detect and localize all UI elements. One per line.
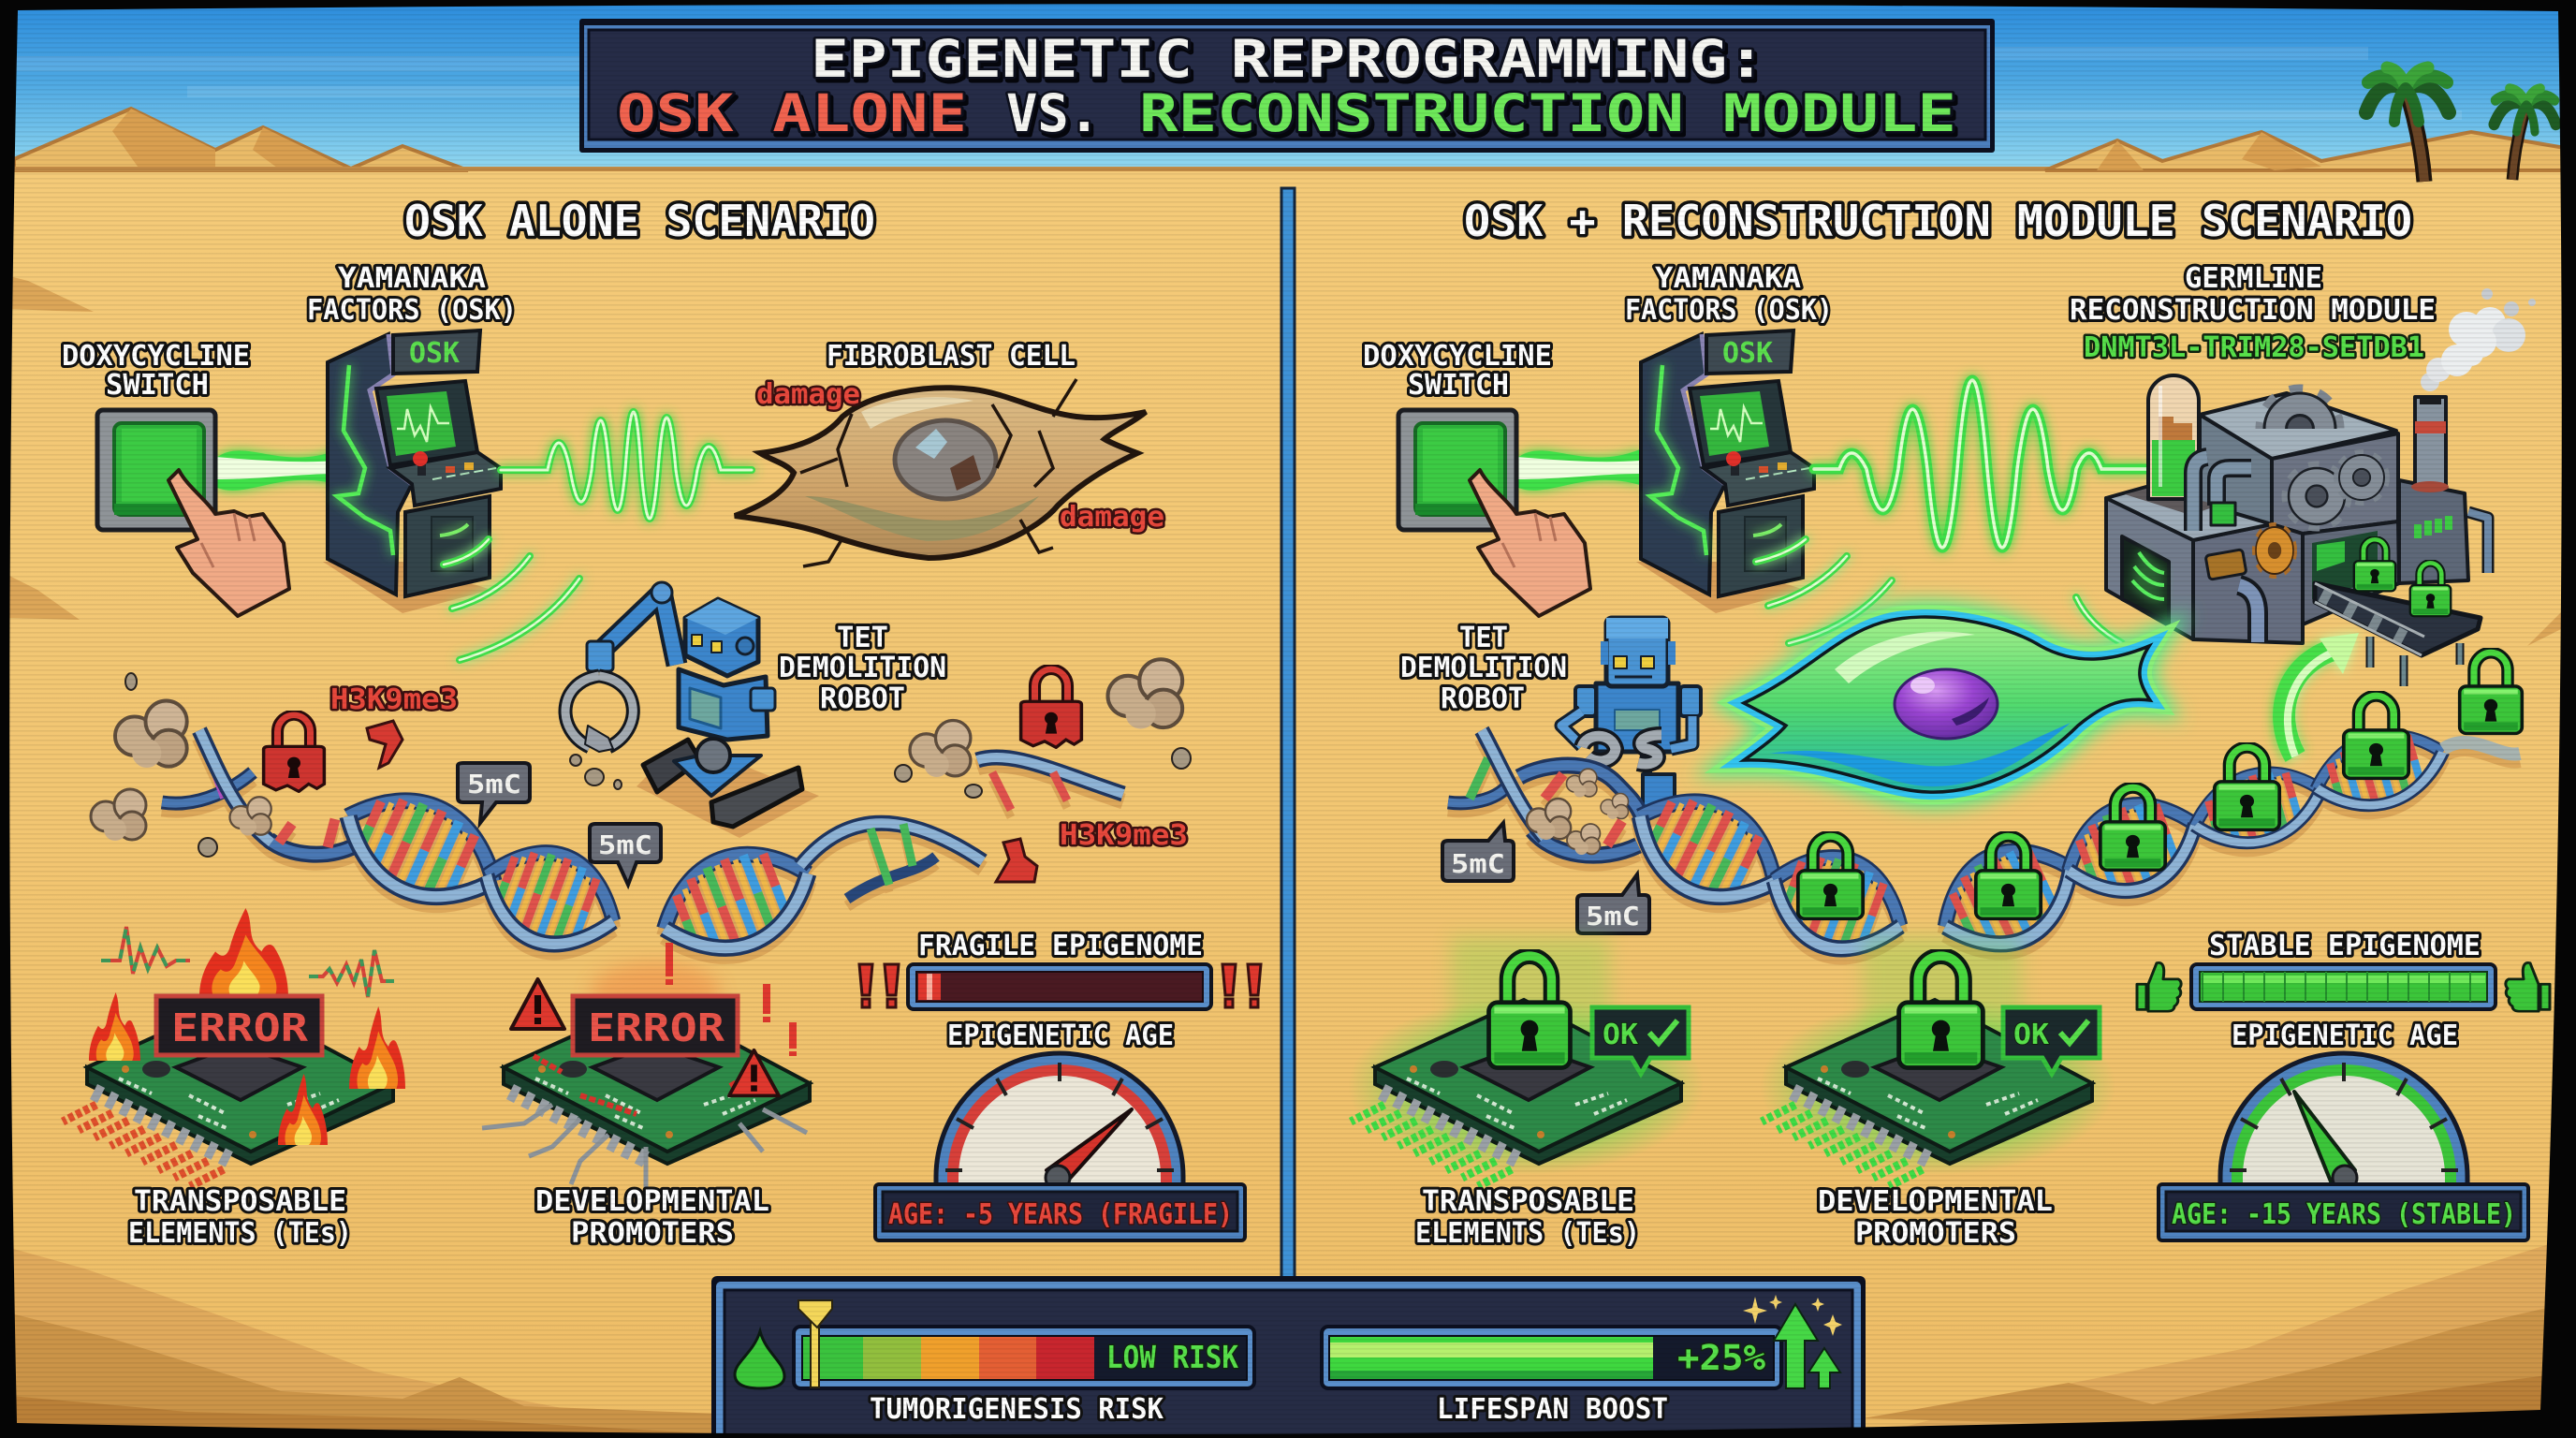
damaged fibroblast cell	[735, 378, 1164, 566]
icon: hand right	[1470, 470, 1590, 616]
icon: recycling arrow	[2284, 633, 2359, 756]
label: transposable elements left: ELEMENTS (TEs)	[128, 1217, 352, 1250]
DNA left	[162, 730, 1123, 971]
label: TET demolition robot left: TET	[837, 622, 888, 654]
stable epigenome bar	[2191, 964, 2496, 1009]
age box left	[875, 1184, 1245, 1240]
label: TET demolition robot right	[1400, 622, 1567, 715]
tumorigenesis risk bar: LOW RISK	[1106, 1339, 1238, 1375]
label: TET demolition robot right: DEMOLITION	[1400, 652, 1567, 684]
background: lower-right dunes	[1863, 1236, 2576, 1438]
label: epigenetic age left: EPIGENETIC AGE	[947, 1020, 1174, 1052]
chip: developmental promoters protected	[1760, 936, 2115, 1186]
chimney base block	[2399, 480, 2468, 583]
label: developmental promoters right: DEVELOPMENTAL	[1818, 1185, 2053, 1218]
OK callout	[2003, 1007, 2100, 1074]
label: tumorigenesis risk: TUMORIGENESIS RISK	[870, 1393, 1164, 1426]
error box: ERROR	[171, 1005, 308, 1050]
risk marker	[798, 1300, 832, 1387]
label: germline reconstruction module: GERMLINE	[2185, 262, 2322, 295]
label: transposable elements right: TRANSPOSABLE	[1422, 1185, 1634, 1218]
label: doxycycline switch right: SWITCH	[1408, 369, 1509, 402]
icon: arcade cabinet left	[323, 330, 501, 613]
background: lower-left dunes	[0, 1245, 721, 1438]
label: doxycycline switch left: SWITCH	[106, 369, 209, 402]
lifespan boost bar	[1322, 1327, 1781, 1388]
center divider	[1281, 188, 1295, 1284]
label: TET demolition robot left: ROBOT	[820, 682, 905, 715]
label: developmental promoters left: PROMOTERS	[571, 1217, 734, 1250]
label: lifespan boost: LIFESPAN BOOST	[1437, 1393, 1668, 1426]
rubble left	[91, 659, 1191, 857]
gauge right	[2220, 1053, 2467, 1190]
left scenario heading: OSK ALONE SCENARIO	[404, 196, 875, 246]
left track	[643, 740, 700, 792]
icon: broken histone mark right	[996, 839, 1037, 882]
callout: 5mC right top: 5mC	[1451, 848, 1505, 879]
callout: 5mC left top: 5mC	[467, 769, 521, 800]
icon: palm tree large	[2366, 67, 2449, 182]
icon: lock on conveyor 1	[2354, 539, 2395, 591]
OK callout: OK	[1603, 1019, 1638, 1051]
OK callout	[1592, 1007, 1689, 1074]
label: transposable elements left	[128, 1185, 352, 1250]
label: transposable elements left: TRANSPOSABLE	[134, 1185, 346, 1218]
callout: 5mC right top	[1442, 823, 1514, 881]
icon: up arrow large	[1774, 1304, 1818, 1388]
label: yamanaka factors right	[1625, 262, 1833, 327]
icon: warning triangle left	[511, 979, 564, 1029]
chip: developmental promoters failing	[482, 943, 810, 1194]
label: fibroblast cell: FIBROBLAST CELL	[827, 340, 1076, 373]
nucleus	[1895, 669, 1998, 739]
icon: warning triangle right	[729, 1050, 779, 1095]
title line 2: OSK ALONE	[617, 83, 967, 143]
callout: 5mC left bottom	[590, 824, 661, 885]
icon: big lock	[1899, 956, 1983, 1067]
icon: hand left	[168, 470, 289, 616]
label: developmental promoters right: PROMOTERS	[1855, 1217, 2016, 1250]
wave right	[1814, 380, 2146, 548]
lifespan boost bar: +25%	[1677, 1338, 1766, 1378]
icon: up arrow small	[1808, 1348, 1840, 1388]
furnace opening	[2122, 536, 2169, 623]
label: damage bottom: damage	[1060, 501, 1164, 534]
icon: broken histone mark left	[367, 721, 402, 768]
beam right	[1516, 449, 1640, 491]
error box: ERROR	[588, 1005, 724, 1050]
pipes	[2193, 457, 2251, 531]
callout: 5mC right bottom: 5mC	[1586, 901, 1640, 932]
gauge left	[936, 1053, 1183, 1190]
glitch trace right	[309, 950, 394, 997]
title line 2: RECONSTRUCTION MODULE	[1139, 83, 1956, 143]
icon: sparkles	[1743, 1295, 1842, 1336]
title line 2	[617, 83, 1956, 143]
rubble right	[1527, 769, 1629, 855]
robot right	[1561, 618, 1701, 819]
label: germline reconstruction module: RECONSTRUCTION MODULE	[2070, 294, 2436, 327]
icon: red lock left	[264, 715, 324, 791]
icon: lock on conveyor 2	[2410, 563, 2451, 616]
label: yamanaka factors left: YAMANAKA	[338, 262, 486, 295]
icon: exclamation pair left	[859, 964, 899, 1007]
icon: exclamation marks	[666, 943, 797, 1056]
label: fragile epigenome: FRAGILE EPIGENOME	[918, 930, 1203, 962]
label: TET demolition robot right: ROBOT	[1441, 682, 1525, 715]
right track	[711, 768, 802, 827]
glass tube	[2148, 375, 2199, 499]
label: H3K9me3 right: H3K9me3	[1060, 819, 1188, 852]
label: yamanaka factors right: FACTORS (OSK)	[1625, 294, 1833, 327]
fragile epigenome bar	[908, 964, 1211, 1009]
green meter bars	[2418, 516, 2449, 538]
chip: transposable elements protected	[1348, 936, 1704, 1186]
callout: 5mC left bottom: 5mC	[598, 829, 652, 860]
title panel	[579, 19, 1995, 153]
icon: flames	[89, 908, 405, 1145]
OK callout: OK	[2013, 1019, 2049, 1051]
label: TET demolition robot left: DEMOLITION	[779, 652, 946, 684]
error box	[573, 996, 738, 1055]
right scenario heading: OSK + RECONSTRUCTION MODULE SCENARIO	[1464, 196, 2412, 246]
chip: transposable elements failing	[63, 908, 405, 1186]
background: sky	[0, 0, 2576, 170]
icon: arcade cabinet right	[1636, 330, 1814, 613]
label: doxycycline switch left: DOXYCYCLINE	[62, 340, 250, 373]
title line 1: EPIGENETIC REPROGRAMMING:	[811, 29, 1765, 89]
icon: red lock right	[1021, 669, 1081, 747]
title line 2: VS.	[1006, 83, 1100, 143]
icon: tumor droplet	[735, 1331, 784, 1388]
factory: germline reconstruction module	[2106, 288, 2536, 686]
background: side sand patches	[9, 276, 2565, 646]
label: transposable elements right: ELEMENTS (TEs)	[1415, 1217, 1640, 1250]
robot left	[565, 582, 819, 838]
arcs right	[1756, 539, 2122, 643]
label: transposable elements right	[1415, 1185, 1640, 1250]
label: doxycycline switch left	[62, 340, 250, 402]
icon: exclamation pair right	[1222, 964, 1261, 1007]
age box right: AGE: -15 YEARS (STABLE)	[2172, 1198, 2516, 1231]
background: horizon dunes left	[0, 109, 2576, 171]
icon: thumbs up right	[2506, 962, 2550, 1011]
arcs left	[444, 539, 579, 660]
label: yamanaka factors left	[307, 262, 517, 327]
label: yamanaka factors left: FACTORS (OSK)	[307, 294, 517, 327]
icon: doxycycline switch right	[1398, 410, 1516, 530]
age box left: AGE: -5 YEARS (FRAGILE)	[888, 1198, 1233, 1231]
wave left	[501, 412, 752, 519]
error box	[156, 996, 322, 1055]
DNA right	[1448, 720, 2520, 968]
background: horizon dunes right	[2045, 132, 2565, 170]
icon: palm tree small	[2494, 88, 2555, 180]
callout: 5mC left top	[458, 763, 530, 823]
label: yamanaka factors right: YAMANAKA	[1655, 262, 1801, 295]
icon: big lock	[1489, 956, 1570, 1067]
glitch trace left	[101, 927, 190, 974]
label: TET demolition robot right: TET	[1459, 622, 1508, 654]
icon: locks along DNA	[1798, 653, 2522, 918]
label: developmental promoters right	[1818, 1185, 2053, 1250]
label: doxycycline switch right	[1363, 340, 1552, 402]
conveyor	[2315, 583, 2481, 686]
chimney	[2411, 397, 2449, 492]
label: H3K9me3 left: H3K9me3	[330, 683, 458, 716]
label: epigenetic age right: EPIGENETIC AGE	[2232, 1020, 2458, 1052]
callout: 5mC right bottom	[1577, 874, 1649, 933]
top half gear	[2256, 384, 2344, 429]
label: stable epigenome: STABLE EPIGENOME	[2209, 930, 2481, 962]
beam left	[215, 449, 339, 491]
tumorigenesis risk bar	[794, 1327, 1254, 1388]
label: TET demolition robot left	[779, 622, 946, 715]
label: developmental promoters left: DEVELOPMENTAL	[535, 1185, 769, 1218]
label: developmental promoters left	[535, 1185, 769, 1250]
background: sky bands	[0, 47, 2462, 120]
age box right	[2159, 1184, 2528, 1240]
label: doxycycline switch right: DOXYCYCLINE	[1363, 340, 1552, 373]
healthy glowing fibroblast cell	[1744, 617, 2150, 792]
label: germline reconstruction module: DNMT3L-TRIM28-SETDB1	[2084, 331, 2424, 364]
icon: doxycycline switch left	[97, 410, 215, 530]
smoke	[2421, 288, 2536, 391]
label: damage top: damage	[756, 378, 860, 411]
icon: thumbs up left	[2137, 962, 2181, 1011]
label: germline reconstruction module	[2070, 262, 2436, 364]
bottom status panel	[711, 1276, 1866, 1438]
